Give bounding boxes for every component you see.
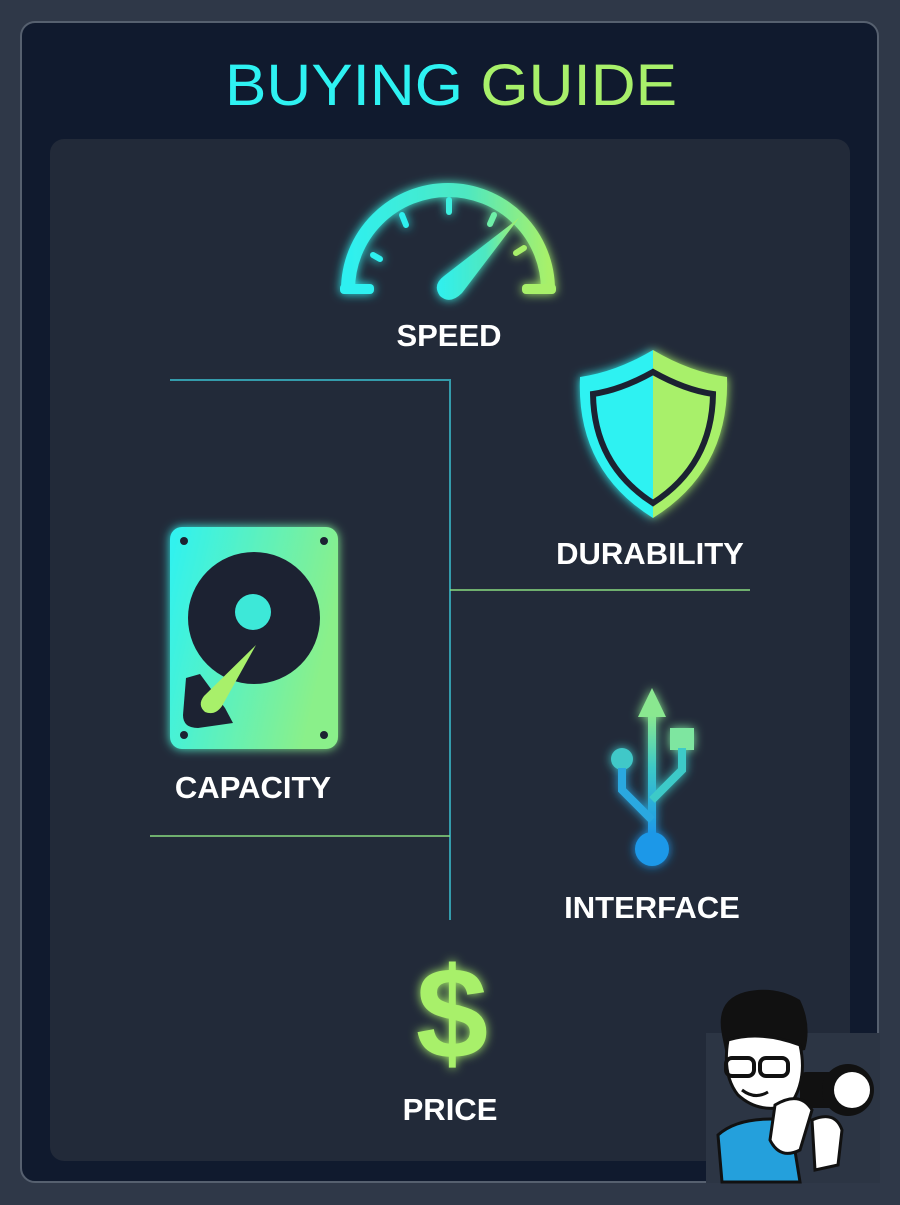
icon: speedometer [340, 190, 556, 300]
icon: usb [611, 688, 694, 866]
label: interface: INTERFACE [564, 890, 740, 925]
panel: main content [50, 139, 850, 1161]
connector lines [150, 380, 750, 920]
label: capacity: CAPACITY [175, 770, 331, 805]
label: durability: DURABILITY [556, 536, 744, 571]
title: BUYING GUIDE [225, 53, 677, 118]
mascot: photographer [706, 990, 880, 1183]
icon: shield [580, 350, 727, 518]
label: speed: SPEED [396, 318, 502, 353]
label: price: PRICE [403, 1092, 497, 1127]
icon: hard drive [170, 527, 338, 749]
icon: dollar: $ [416, 940, 488, 1086]
